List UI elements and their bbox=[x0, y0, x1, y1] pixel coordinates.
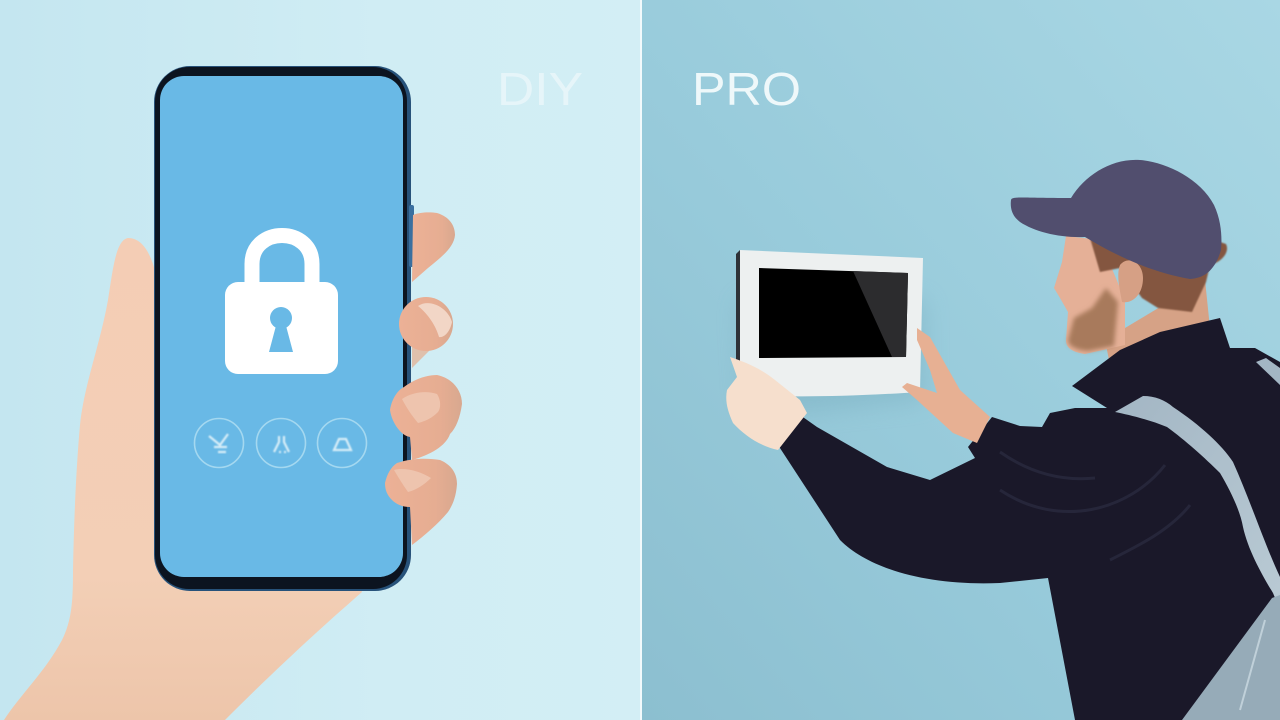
phone bbox=[154, 66, 414, 591]
fingers bbox=[385, 212, 462, 545]
center divider bbox=[640, 0, 642, 720]
intercom panel bbox=[736, 250, 925, 412]
index finger bbox=[412, 212, 455, 282]
phone bezel bbox=[155, 67, 407, 589]
hand palm and thumb behind phone bbox=[4, 238, 362, 720]
right hand bbox=[902, 328, 990, 443]
heading: DIY: DIY bbox=[497, 63, 583, 115]
middle finger bbox=[412, 345, 430, 368]
icon: three circular buttons bbox=[194, 418, 366, 468]
icon: padlock bbox=[225, 236, 338, 374]
intercom screen bbox=[759, 268, 908, 358]
jacket bbox=[778, 318, 1280, 720]
worker bbox=[726, 160, 1280, 720]
face bbox=[1054, 236, 1125, 354]
jacket fold highlights bbox=[1000, 452, 1190, 560]
ring finger bbox=[390, 375, 462, 460]
screen glare bbox=[853, 271, 908, 357]
middle fingertip bbox=[399, 297, 453, 351]
panel: PRO background bbox=[642, 0, 1280, 720]
little finger bbox=[385, 459, 457, 545]
phone outer edge bbox=[154, 66, 411, 591]
intercom frame bbox=[740, 250, 923, 396]
ring nail bbox=[402, 392, 440, 423]
intercom left edge bbox=[736, 250, 740, 376]
panel: DIY background bbox=[0, 0, 640, 720]
neck bbox=[1105, 280, 1210, 365]
phone side button bbox=[409, 205, 414, 267]
left hand bbox=[726, 357, 807, 450]
backpack seam bbox=[1240, 620, 1265, 710]
cap bbox=[1011, 160, 1221, 279]
intercom buttons bbox=[775, 370, 888, 378]
backpack strap bbox=[1115, 396, 1280, 610]
backpack body bbox=[1182, 595, 1280, 720]
little nail bbox=[394, 469, 431, 492]
ear bbox=[1118, 260, 1143, 302]
backpack strap upper bbox=[1256, 358, 1280, 385]
heading: PRO: PRO bbox=[692, 63, 801, 115]
hair bbox=[1090, 235, 1227, 312]
middle nail bbox=[418, 303, 452, 337]
beard bbox=[1068, 288, 1118, 351]
wall shadow bbox=[740, 300, 925, 412]
phone screen bbox=[160, 76, 403, 577]
